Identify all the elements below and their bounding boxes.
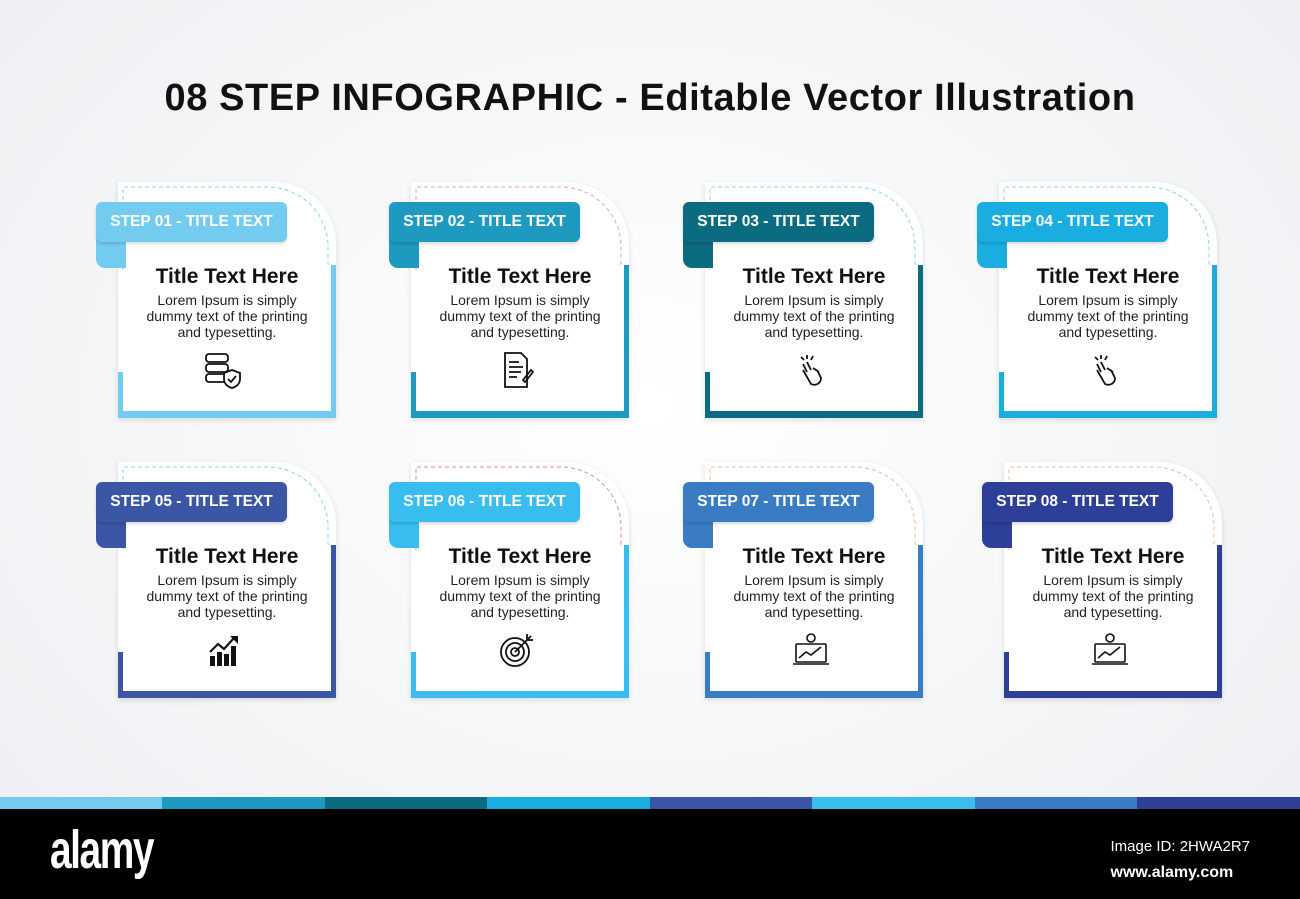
heading: Title Text Here [156, 265, 298, 288]
image id [1110, 838, 1250, 881]
logo: alamy [50, 820, 153, 880]
text: and typesetting. [471, 324, 569, 340]
icon: laptop analytics [1092, 633, 1128, 665]
text: and typesetting. [765, 324, 863, 340]
color bar [0, 797, 1300, 809]
text: dummy text of the printing [1032, 588, 1194, 604]
card: step 08 [981, 462, 1224, 702]
card: step 01 [95, 182, 338, 422]
tab: step 06: STEP 06 - TITLE TEXT [403, 493, 566, 510]
text: dummy text of the printing [733, 308, 895, 324]
tab: step 05 [96, 482, 287, 522]
image id: Image ID: 2HWA2R7 [1110, 838, 1250, 855]
tab: step 03 [683, 202, 874, 242]
text [439, 572, 601, 620]
card: step 02 [388, 185, 630, 422]
text: Lorem Ipsum is simply [744, 292, 884, 308]
icon: finger snap [1094, 355, 1116, 386]
heading: Title Text Here [449, 545, 591, 568]
text [146, 292, 308, 340]
tab: step 02: STEP 02 - TITLE TEXT [403, 213, 566, 230]
tab: step 04: STEP 04 - TITLE TEXT [991, 213, 1154, 230]
tab: step 01 [96, 202, 287, 242]
text: and typesetting. [178, 324, 276, 340]
text [439, 292, 601, 340]
text [733, 292, 895, 340]
heading: Title Text Here [743, 545, 885, 568]
text: Lorem Ipsum is simply [157, 572, 297, 588]
tab: step 08: STEP 08 - TITLE TEXT [996, 493, 1159, 510]
text: dummy text of the printing [146, 308, 308, 324]
title: 08 STEP INFOGRAPHIC - Editable Vector Illustration [164, 77, 1136, 119]
image id: www.alamy.com [1110, 864, 1233, 881]
icon: server shield [205, 353, 241, 389]
card: step 03 [682, 185, 924, 422]
text: dummy text of the printing [439, 308, 601, 324]
icon: laptop analytics [793, 633, 829, 665]
icon: growth chart [209, 636, 238, 666]
text: Lorem Ipsum is simply [450, 572, 590, 588]
text [1032, 572, 1194, 620]
text: dummy text of the printing [439, 588, 601, 604]
text: and typesetting. [178, 604, 276, 620]
card: step 06 [388, 465, 630, 702]
icon: document [504, 352, 534, 388]
text: Lorem Ipsum is simply [1043, 572, 1183, 588]
heading: Title Text Here [743, 265, 885, 288]
card: step 05 [95, 462, 338, 702]
text: and typesetting. [1059, 324, 1157, 340]
text [1027, 292, 1189, 340]
heading: Title Text Here [449, 265, 591, 288]
icon: target [500, 634, 533, 667]
icon: finger snap [800, 355, 822, 386]
tab: step 02 [389, 202, 580, 242]
heading: Title Text Here [156, 545, 298, 568]
text: and typesetting. [471, 604, 569, 620]
text: and typesetting. [1064, 604, 1162, 620]
card: step 07 [682, 465, 924, 702]
text: and typesetting. [765, 604, 863, 620]
tab: step 01: STEP 01 - TITLE TEXT [110, 213, 273, 230]
heading: Title Text Here [1037, 265, 1179, 288]
footer [0, 809, 1300, 899]
text: Lorem Ipsum is simply [157, 292, 297, 308]
text: Lorem Ipsum is simply [744, 572, 884, 588]
tab: step 06 [389, 482, 580, 522]
text: dummy text of the printing [146, 588, 308, 604]
text: dummy text of the printing [733, 588, 895, 604]
text: Lorem Ipsum is simply [1038, 292, 1178, 308]
text [733, 572, 895, 620]
tab: step 04 [977, 202, 1168, 242]
text: dummy text of the printing [1027, 308, 1189, 324]
card: step 04 [976, 182, 1218, 422]
tab: step 08 [982, 482, 1173, 522]
tab: step 07: STEP 07 - TITLE TEXT [697, 493, 860, 510]
tab: step 07 [683, 482, 874, 522]
heading: Title Text Here [1042, 545, 1184, 568]
tab: step 03: STEP 03 - TITLE TEXT [697, 213, 860, 230]
text [146, 572, 308, 620]
text: Lorem Ipsum is simply [450, 292, 590, 308]
tab: step 05: STEP 05 - TITLE TEXT [110, 493, 273, 510]
